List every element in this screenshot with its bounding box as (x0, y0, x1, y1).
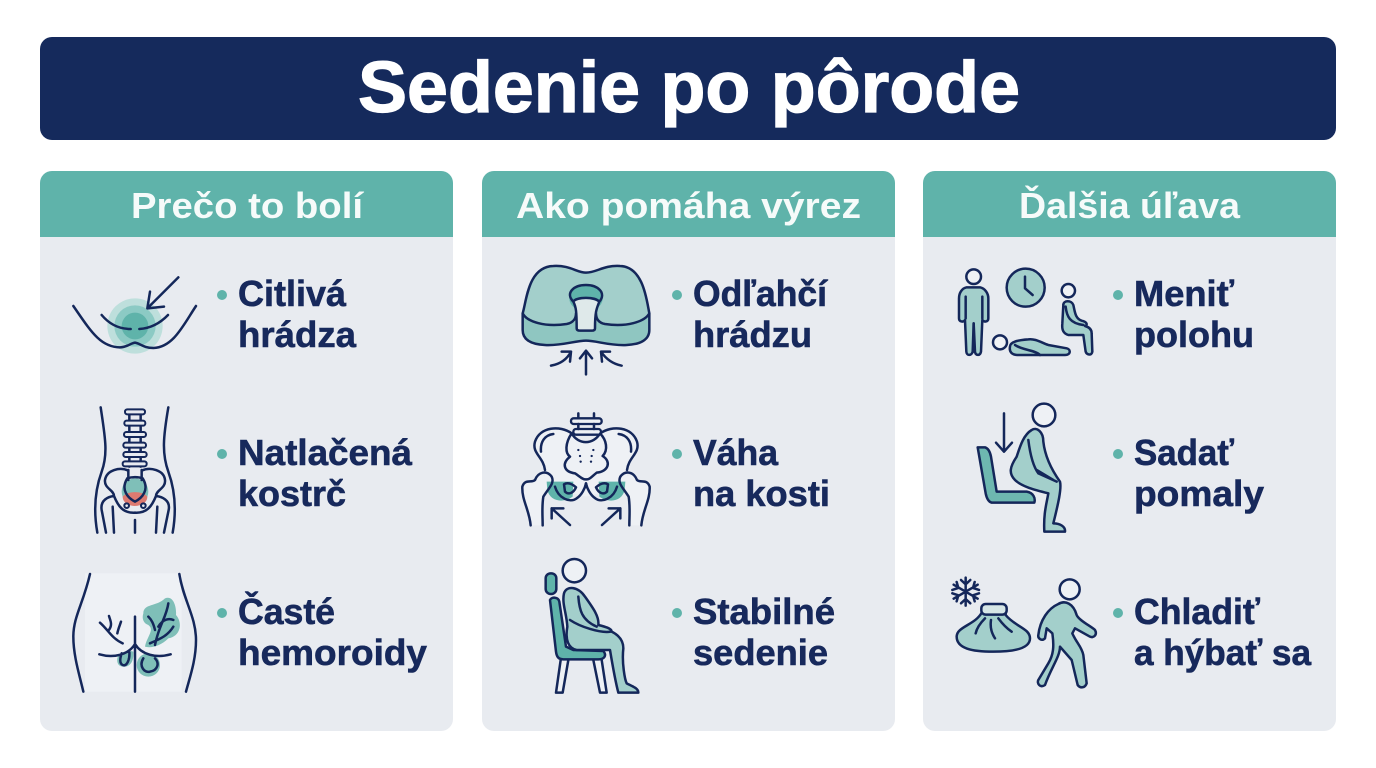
label: Citlivá hrádza: Citlivá (238, 273, 347, 314)
label: Chladiť a hýbať sa (1113, 591, 1312, 673)
panel: Ako pomáha výrez (482, 171, 895, 731)
label: Časté hemoroidy (217, 590, 427, 673)
label: Meniť polohu: polohu (1134, 314, 1254, 355)
label: Sadať pomaly: pomaly (1134, 473, 1264, 514)
icon: changing position (959, 269, 1092, 355)
label: Stabilné sedenie: sedenie (693, 632, 828, 673)
icon: sensitive perineum (73, 277, 196, 354)
label: Chladiť a hýbať sa: a hýbať sa (1134, 632, 1312, 673)
label: Časté hemoroidy: hemoroidy (238, 632, 427, 673)
label: Odľahčí hrádzu: Odľahčí (693, 273, 828, 314)
icon: hemorrhoids (73, 573, 196, 692)
label: Stabilné sedenie (672, 591, 835, 673)
label: Citlivá hrádza: hrádza (238, 314, 357, 355)
label: Váha na kosti (672, 432, 830, 514)
heading: Ďalšia úľava: Ďalšia úľava (1019, 184, 1241, 226)
label: Meniť polohu: Meniť (1134, 273, 1235, 314)
icon: pelvis bones (522, 413, 650, 525)
heading: Prečo to bolí: Prečo to bolí (131, 185, 364, 226)
label: Natlačená kostrč: Natlačená (238, 432, 413, 473)
label: Chladiť a hýbať sa: Chladiť (1134, 591, 1261, 632)
label: Časté hemoroidy: Časté (238, 590, 335, 632)
panel: Ďalšia úľava (923, 171, 1336, 731)
icon: cut-out cushion (523, 266, 649, 374)
label: Stabilné sedenie: Stabilné (693, 591, 835, 632)
label: Váha na kosti: na kosti (693, 473, 830, 514)
label: Meniť polohu (1113, 273, 1254, 355)
icon: ice pack and walking (952, 578, 1096, 687)
label: Natlačená kostrč: kostrč (238, 473, 346, 514)
icon: sitting down slowly (978, 404, 1065, 532)
icon: pressed coccyx (95, 407, 175, 533)
label: Natlačená kostrč (217, 432, 413, 514)
title banner: Sedenie po pôrode (358, 48, 1020, 128)
label: Sadať pomaly (1113, 432, 1264, 514)
label: Odľahčí hrádzu: hrádzu (693, 314, 812, 355)
label: Váha na kosti: Váha (693, 432, 779, 473)
title banner (40, 37, 1336, 140)
icon: seated pregnant woman (546, 559, 638, 693)
heading: Ako pomáha výrez: Ako pomáha výrez (516, 185, 861, 226)
panel: Prečo to bolí (40, 171, 453, 731)
label: Sadať pomaly: Sadať (1134, 432, 1235, 473)
label: Odľahčí hrádzu (672, 273, 828, 355)
label: Citlivá hrádza (217, 273, 357, 355)
